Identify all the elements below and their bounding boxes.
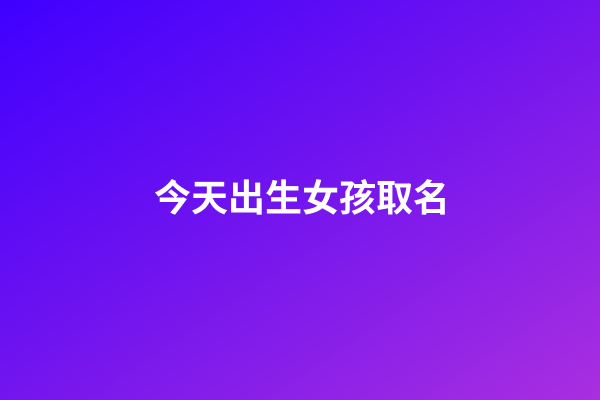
title: 今天出生女孩取名 bbox=[154, 178, 450, 219]
